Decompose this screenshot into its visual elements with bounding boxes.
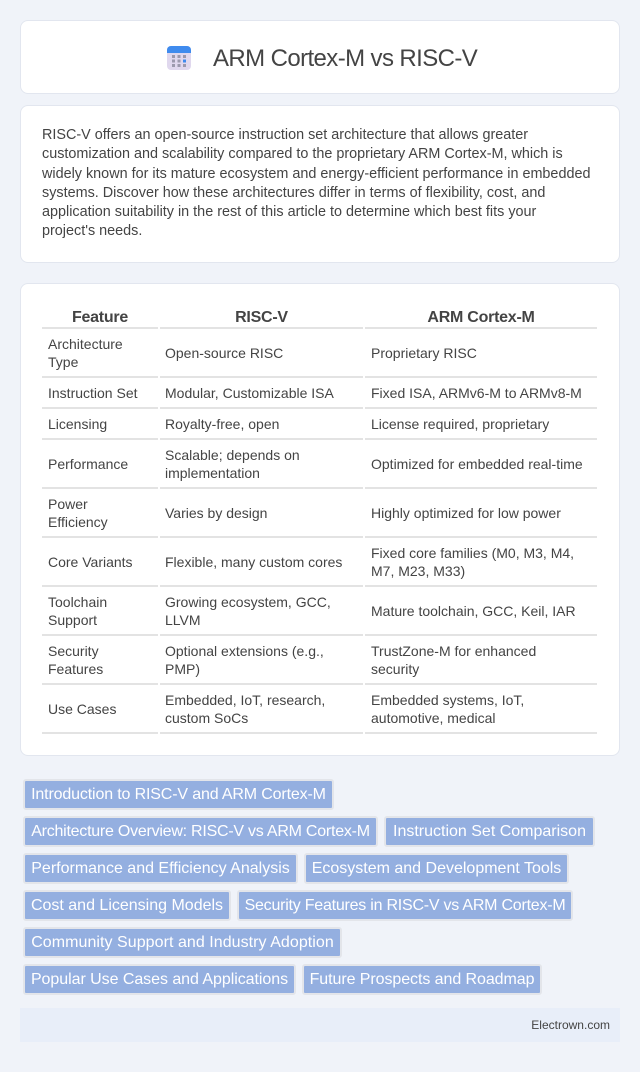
tag: Future Prospects and Roadmap — [310, 971, 534, 988]
header panel — [20, 20, 620, 94]
tag — [384, 816, 595, 847]
comparison table: Growing ecosystem, GCC, — [165, 594, 331, 610]
comparison table: Flexible, many custom cores — [165, 554, 342, 570]
tag — [302, 964, 542, 995]
comparison table: Performance — [48, 456, 128, 472]
intro paragraph: customization and scalability compared to the proprietary ARM Cortex-M, which is — [42, 146, 563, 162]
tag: Architecture Overview: RISC-V vs ARM Cortex-M — [31, 823, 370, 840]
comparison table: Use Cases — [48, 700, 116, 716]
tag — [23, 964, 296, 995]
comparison table: Optional extensions (e.g., — [165, 642, 324, 658]
comparison table: ARM Cortex-M — [427, 308, 535, 326]
tag: Performance and Efficiency Analysis — [31, 860, 290, 877]
tag: Instruction Set Comparison — [393, 823, 586, 840]
comparison table: Fixed ISA, ARMv6-M to ARMv8-M — [371, 384, 582, 400]
tag: Community Support and Industry Adoption — [31, 934, 334, 951]
comparison table: Licensing — [48, 416, 107, 432]
comparison table: M7, M23, M33) — [371, 562, 465, 578]
topic tags — [23, 779, 595, 995]
comparison table: Varies by design — [165, 504, 267, 520]
tag — [23, 779, 334, 810]
comparison table: Open-source RISC — [165, 344, 283, 360]
intro paragraph — [42, 127, 590, 239]
comparison table: Power — [48, 496, 88, 512]
comparison table: Mature toolchain, GCC, Keil, IAR — [371, 602, 576, 618]
tag — [237, 890, 573, 921]
tag: Cost and Licensing Models — [31, 897, 223, 914]
tag: Ecosystem and Development Tools — [312, 860, 561, 877]
comparison table: Core Variants — [48, 554, 133, 570]
comparison table: LLVM — [165, 612, 201, 628]
tag — [23, 890, 231, 921]
comparison table: automotive, medical — [371, 710, 496, 726]
comparison table: Embedded, IoT, research, — [165, 692, 325, 708]
comparison table: Scalable; depends on — [165, 446, 300, 462]
comparison table: Highly optimized for low power — [371, 504, 561, 520]
comparison table: Embedded systems, IoT, — [371, 692, 524, 708]
comparison table: security — [371, 660, 419, 676]
title: ARM Cortex-M vs RISC-V — [213, 45, 477, 72]
intro paragraph: systems. Discover how these architectures differ in terms of flexibility, cost, and — [42, 185, 545, 201]
tag — [23, 927, 342, 958]
comparison table: Feature — [72, 308, 128, 326]
intro paragraph: project's needs. — [42, 223, 142, 239]
comparison table: Modular, Customizable ISA — [165, 384, 334, 400]
comparison table: Architecture — [48, 336, 123, 352]
intro paragraph: RISC-V offers an open-source instruction set architecture that allows greater — [42, 127, 528, 143]
comparison table: Proprietary RISC — [371, 344, 477, 360]
comparison table panel — [20, 283, 620, 756]
intro paragraph: widely known for its mature ecosystem and energy-efficient performance in embedded — [42, 166, 590, 182]
comparison table: License required, proprietary — [371, 416, 549, 432]
comparison table: Optimized for embedded real-time — [371, 456, 583, 472]
footer bar — [20, 1008, 620, 1042]
comparison table: Fixed core families (M0, M3, M4, — [371, 544, 574, 560]
icon: calendar app — [167, 46, 191, 70]
comparison table: Security — [48, 642, 99, 658]
comparison table: PMP) — [165, 660, 200, 676]
comparison table: TrustZone-M for enhanced — [371, 642, 536, 658]
tag — [23, 853, 298, 884]
tag — [23, 816, 378, 847]
comparison table: Type — [48, 354, 78, 370]
tag — [304, 853, 569, 884]
comparison table — [42, 308, 597, 734]
comparison table: Efficiency — [48, 514, 108, 530]
comparison table: custom SoCs — [165, 710, 248, 726]
comparison table: Features — [48, 660, 103, 676]
tag: Introduction to RISC-V and ARM Cortex-M — [31, 786, 326, 803]
comparison table: Instruction Set — [48, 384, 138, 400]
comparison table: Toolchain — [48, 594, 107, 610]
tag: Popular Use Cases and Applications — [31, 971, 288, 988]
intro paragraph: application suitability in the rest of this article to determine which best fits your — [42, 204, 536, 220]
tag: Security Features in RISC-V vs ARM Cortex-M — [245, 897, 565, 914]
comparison table: implementation — [165, 464, 260, 480]
footer credit: Electrown.com — [531, 1018, 610, 1032]
comparison table: Support — [48, 612, 97, 628]
intro text panel — [20, 105, 620, 263]
comparison table: Royalty-free, open — [165, 416, 279, 432]
comparison table: RISC-V — [235, 308, 288, 326]
